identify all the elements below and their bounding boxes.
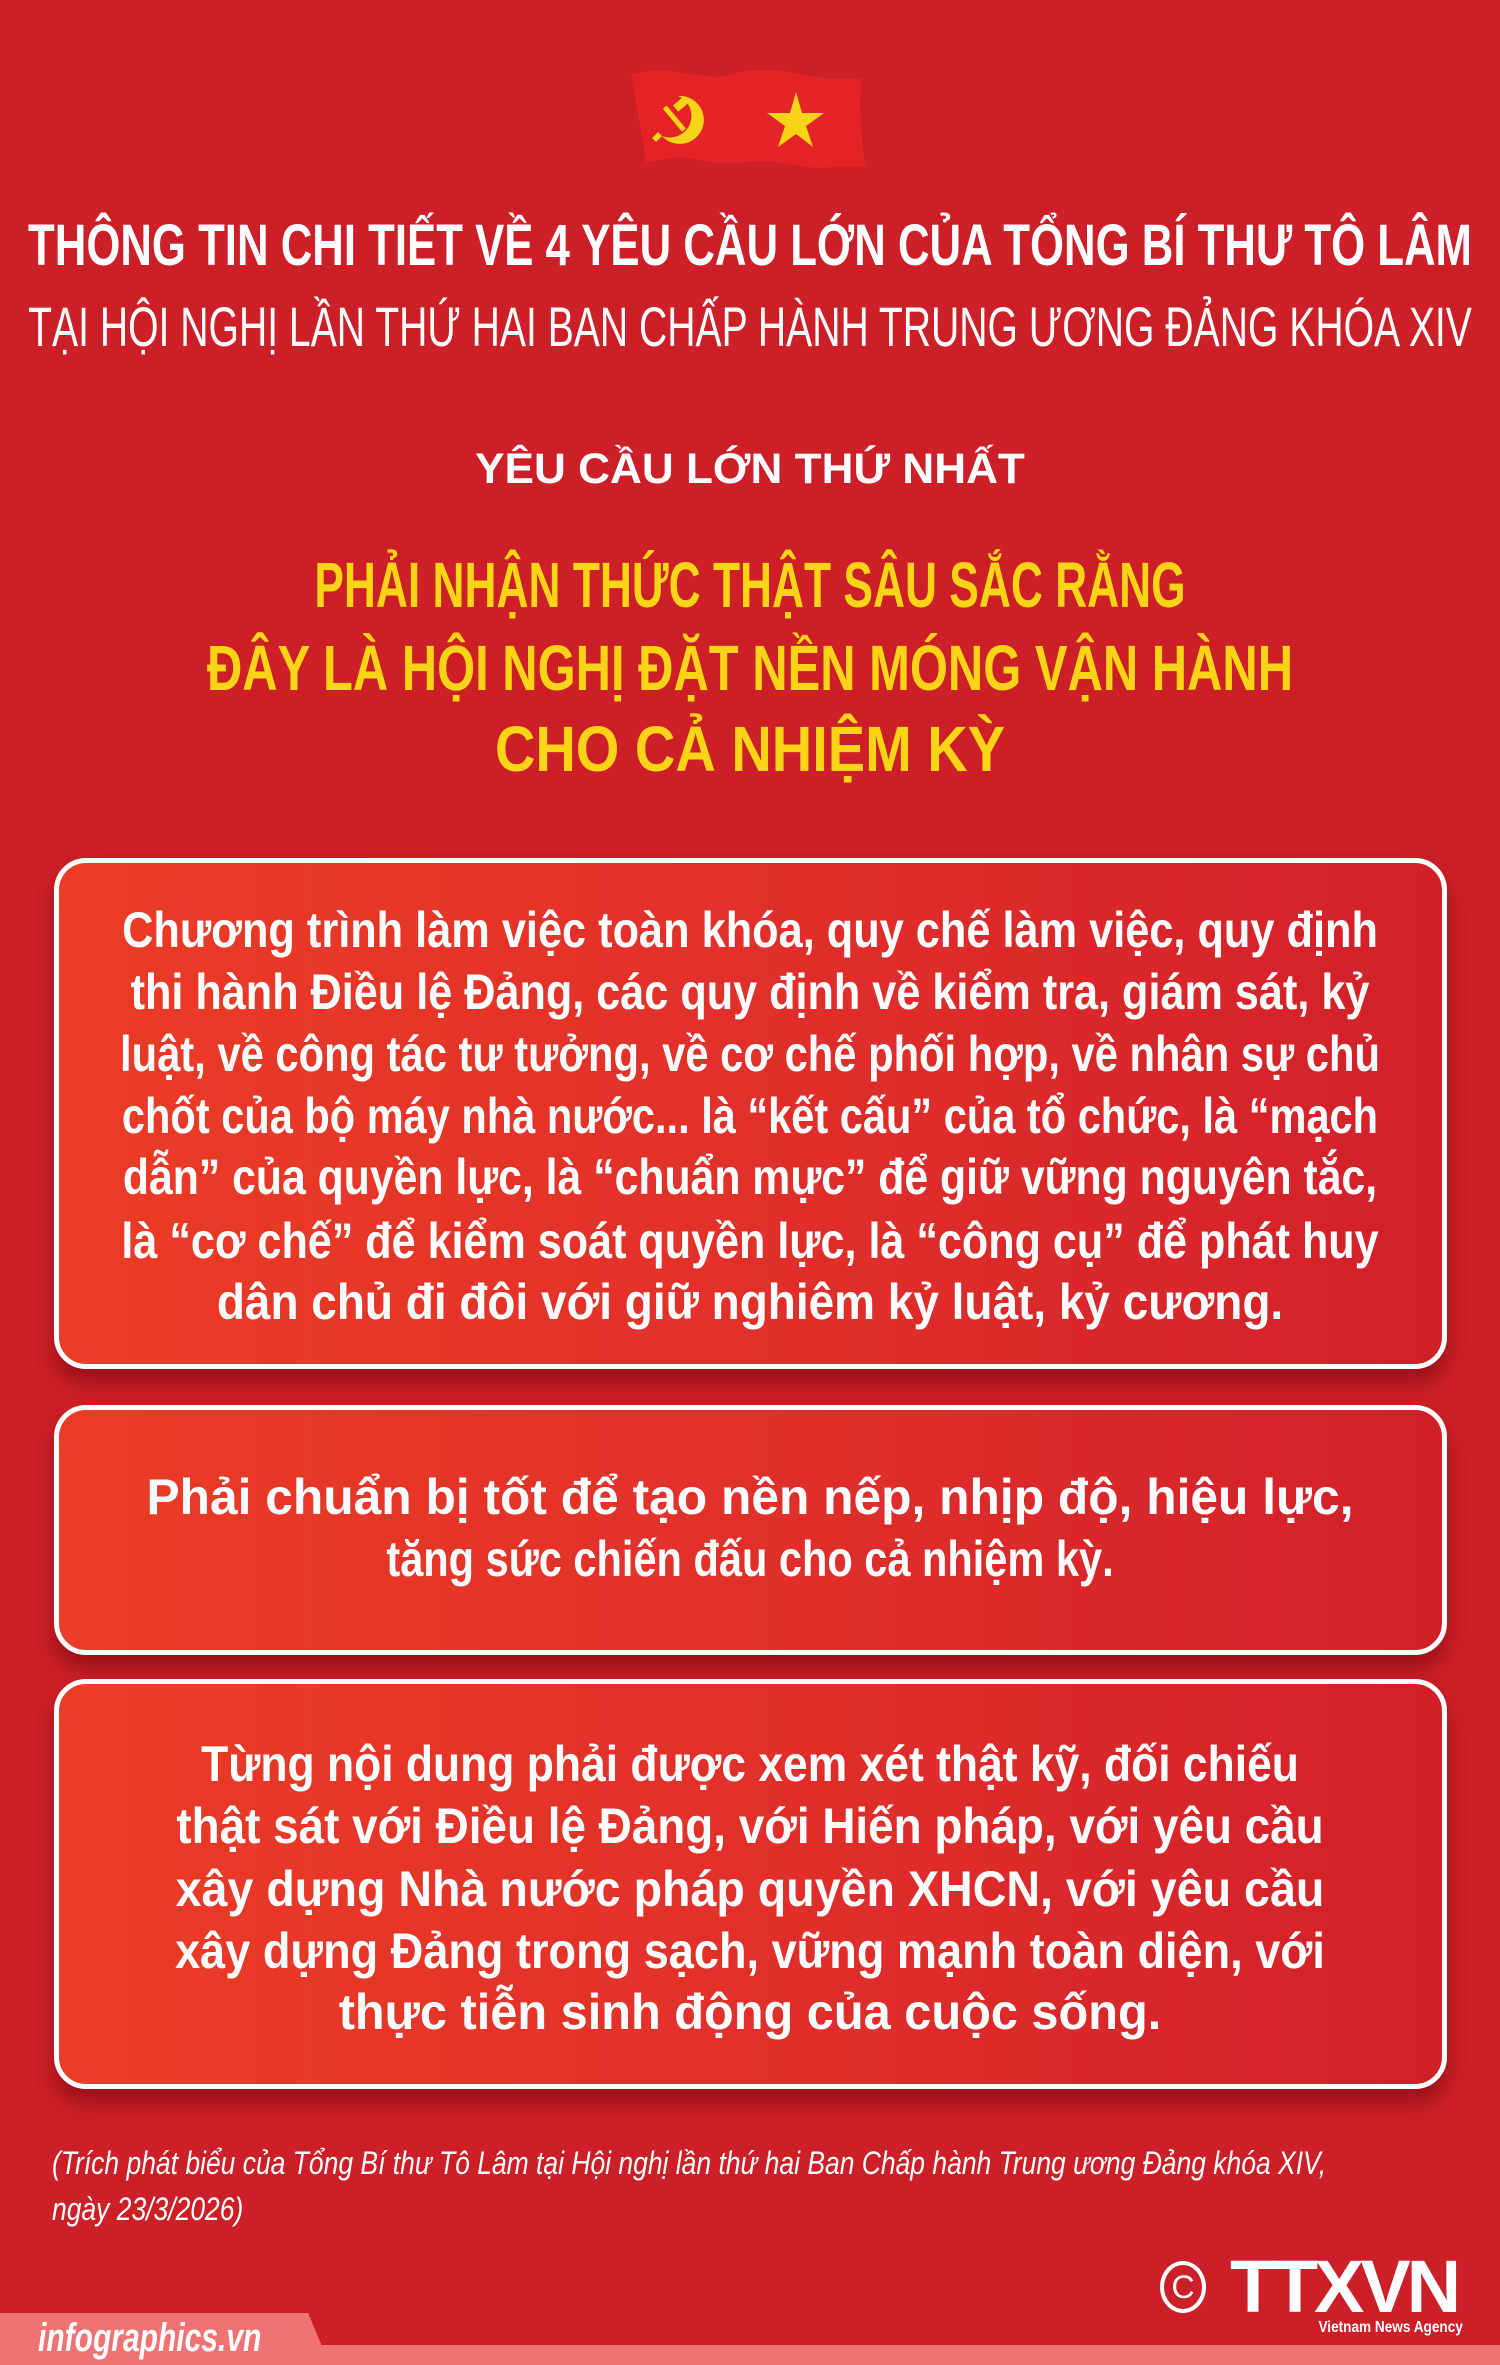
box 3 text: [175, 1736, 1325, 2040]
box 1 text: [120, 902, 1380, 1330]
box 1 text: Chương trình làm việc toàn khóa, quy chế làm việc, quy định: [122, 902, 1378, 958]
box 2 text: Phải chuẩn bị tốt để tạo nền nếp, nhịp độ, hiệu lực,: [146, 1469, 1354, 1525]
logo: TTXVN: Vietnam News Agency: [1319, 2319, 1463, 2336]
box 1 text: thi hành Điều lệ Đảng, các quy định về kiểm tra, giám sát, kỷ: [131, 964, 1369, 1020]
yellow headline: ĐÂY LÀ HỘI NGHỊ ĐẶT NỀN MÓNG VẬN HÀNH: [207, 632, 1293, 704]
footer tab: infographics.vn: infographics.vn: [38, 2316, 261, 2360]
panel: box 3: [54, 1679, 1447, 2089]
box 1 text: chốt của bộ máy nhà nước... là “kết cấu” của tổ chức, là “mạch: [122, 1088, 1378, 1144]
title: THÔNG TIN CHI TIẾT VỀ 4 YÊU CẦU LỚN CỦA TỔNG BÍ THƯ TÔ LÂM: [28, 213, 1472, 278]
box 2 text: [146, 1469, 1354, 1587]
logo: TTXVN: TTXVN: [1230, 2245, 1457, 2328]
citation: [52, 2145, 1326, 2227]
flag icon: [631, 70, 865, 168]
section label: YÊU CẦU LỚN THỨ NHẤT: [475, 445, 1025, 493]
yellow headline: [207, 549, 1293, 785]
box 1 text: luật, về công tác tư tưởng, về cơ chế phối hợp, về nhân sự chủ: [120, 1026, 1380, 1082]
box 3 text: xây dựng Đảng trong sạch, vững mạnh toàn diện, với: [175, 1923, 1325, 1979]
footer tab: infographics.vn: [0, 2313, 322, 2360]
box 3 text: thật sát với Điều lệ Đảng, với Hiến pháp, với yêu cầu: [176, 1798, 1324, 1854]
box 3 text: xây dựng Nhà nước pháp quyền XHCN, với yêu cầu: [176, 1861, 1324, 1917]
yellow headline: CHO CẢ NHIỆM KỲ: [495, 713, 1005, 785]
box 2 text: tăng sức chiến đấu cho cả nhiệm kỳ.: [386, 1531, 1114, 1587]
logo: TTXVN: C: [1171, 2269, 1195, 2305]
icon: star: [767, 92, 824, 147]
footer strip: [0, 2345, 1500, 2365]
icon: hammer and sickle: [652, 96, 704, 144]
box 1 text: dẫn” của quyền lực, là “chuẩn mực” để giữ vững nguyên tắc,: [123, 1149, 1377, 1205]
yellow headline: PHẢI NHẬN THỨC THẬT SÂU SẮC RẰNG: [314, 549, 1186, 621]
box 1 text: là “cơ chế” để kiểm soát quyền lực, là “công cụ” để phát huy: [121, 1213, 1379, 1269]
logo: TTXVN: [1160, 2245, 1463, 2336]
subtitle: TẠI HỘI NGHỊ LẦN THỨ HAI BAN CHẤP HÀNH TRUNG ƯƠNG ĐẢNG KHÓA XIV: [28, 295, 1472, 358]
panel: box 1: [54, 858, 1447, 1369]
citation: ngày 23/3/2026): [52, 2191, 243, 2227]
box 3 text: Từng nội dung phải được xem xét thật kỹ, đối chiếu: [201, 1736, 1299, 1792]
box 3 text: thực tiễn sinh động của cuộc sống.: [339, 1984, 1161, 2040]
box 1 text: dân chủ đi đôi với giữ nghiêm kỷ luật, kỷ cương.: [217, 1274, 1283, 1330]
citation: (Trích phát biểu của Tổng Bí thư Tô Lâm tại Hội nghị lần thứ hai Ban Chấp hành Trung ương Đảng khóa XIV,: [52, 2145, 1326, 2181]
panel: box 2: [54, 1405, 1447, 1655]
